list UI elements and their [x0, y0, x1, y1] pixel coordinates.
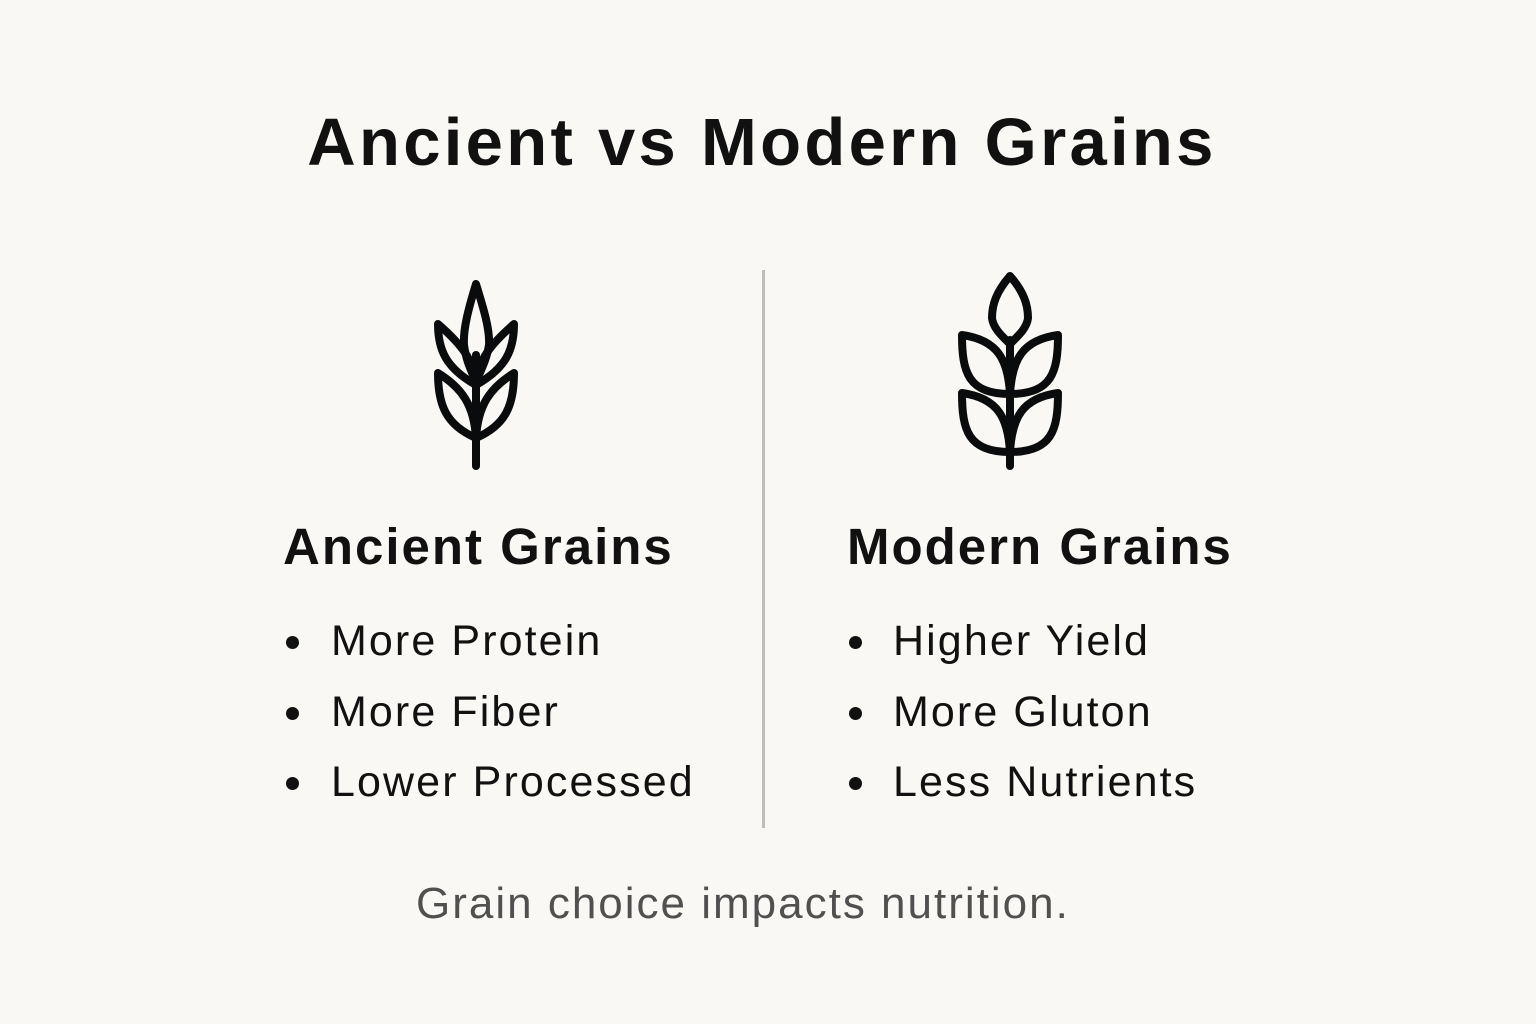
list: modern grains: Less Nutrients	[893, 758, 1197, 806]
list: ancient grains: More Fiber	[331, 688, 560, 736]
list: modern grains: Higher Yield	[893, 617, 1150, 665]
divider	[762, 270, 765, 828]
list: modern grains	[849, 617, 1197, 806]
list: modern grains: More Gluton	[893, 688, 1153, 736]
title: Ancient vs Modern Grains	[307, 105, 1217, 180]
list: ancient grains	[286, 617, 695, 806]
heading: modern grains: Modern Grains	[847, 518, 1233, 575]
heading: ancient grains: Ancient Grains	[283, 518, 674, 575]
list: ancient grains: Lower Processed	[331, 758, 695, 806]
list: ancient grains: More Protein	[331, 617, 602, 665]
footer caption: Grain choice impacts nutrition.	[416, 879, 1070, 928]
